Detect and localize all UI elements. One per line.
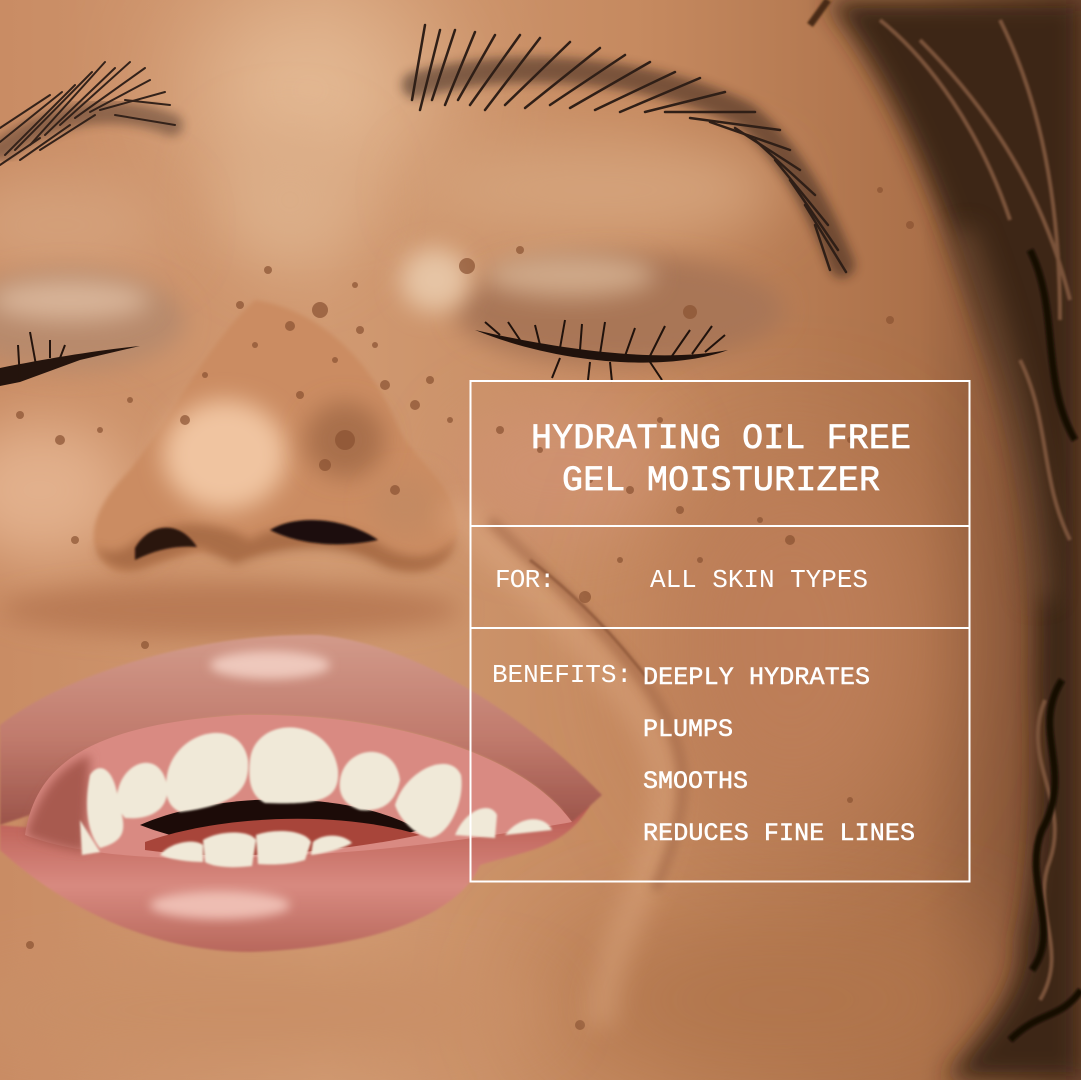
right eyebrow xyxy=(412,25,846,272)
benefits list: SMOOTHS xyxy=(643,767,748,796)
heading xyxy=(531,419,911,501)
mouth xyxy=(0,635,602,952)
cheek crease xyxy=(448,506,683,1026)
left eyebrow xyxy=(0,62,175,165)
for row: ALL SKIN TYPES xyxy=(650,565,868,595)
upper lip xyxy=(0,635,602,825)
info panel frame and text xyxy=(470,381,970,882)
hair xyxy=(810,0,1081,1080)
benefits list: REDUCES FINE LINES xyxy=(643,819,915,848)
gums and mouth interior xyxy=(25,715,572,858)
freckles xyxy=(16,187,914,1030)
heading: HYDRATING OIL FREE xyxy=(531,419,911,459)
benefits list: DEEPLY HYDRATES xyxy=(643,663,870,692)
left eye xyxy=(0,270,185,386)
benefits list: PLUMPS xyxy=(643,715,733,744)
nose xyxy=(94,300,458,573)
right eye xyxy=(400,248,785,382)
lower lip xyxy=(0,805,590,952)
for row xyxy=(495,565,868,595)
for row: FOR: xyxy=(495,565,555,595)
benefits list xyxy=(643,663,915,848)
teeth xyxy=(80,727,552,867)
benefits label: BENEFITS: xyxy=(492,660,632,690)
heading: GEL MOISTURIZER xyxy=(562,461,880,501)
